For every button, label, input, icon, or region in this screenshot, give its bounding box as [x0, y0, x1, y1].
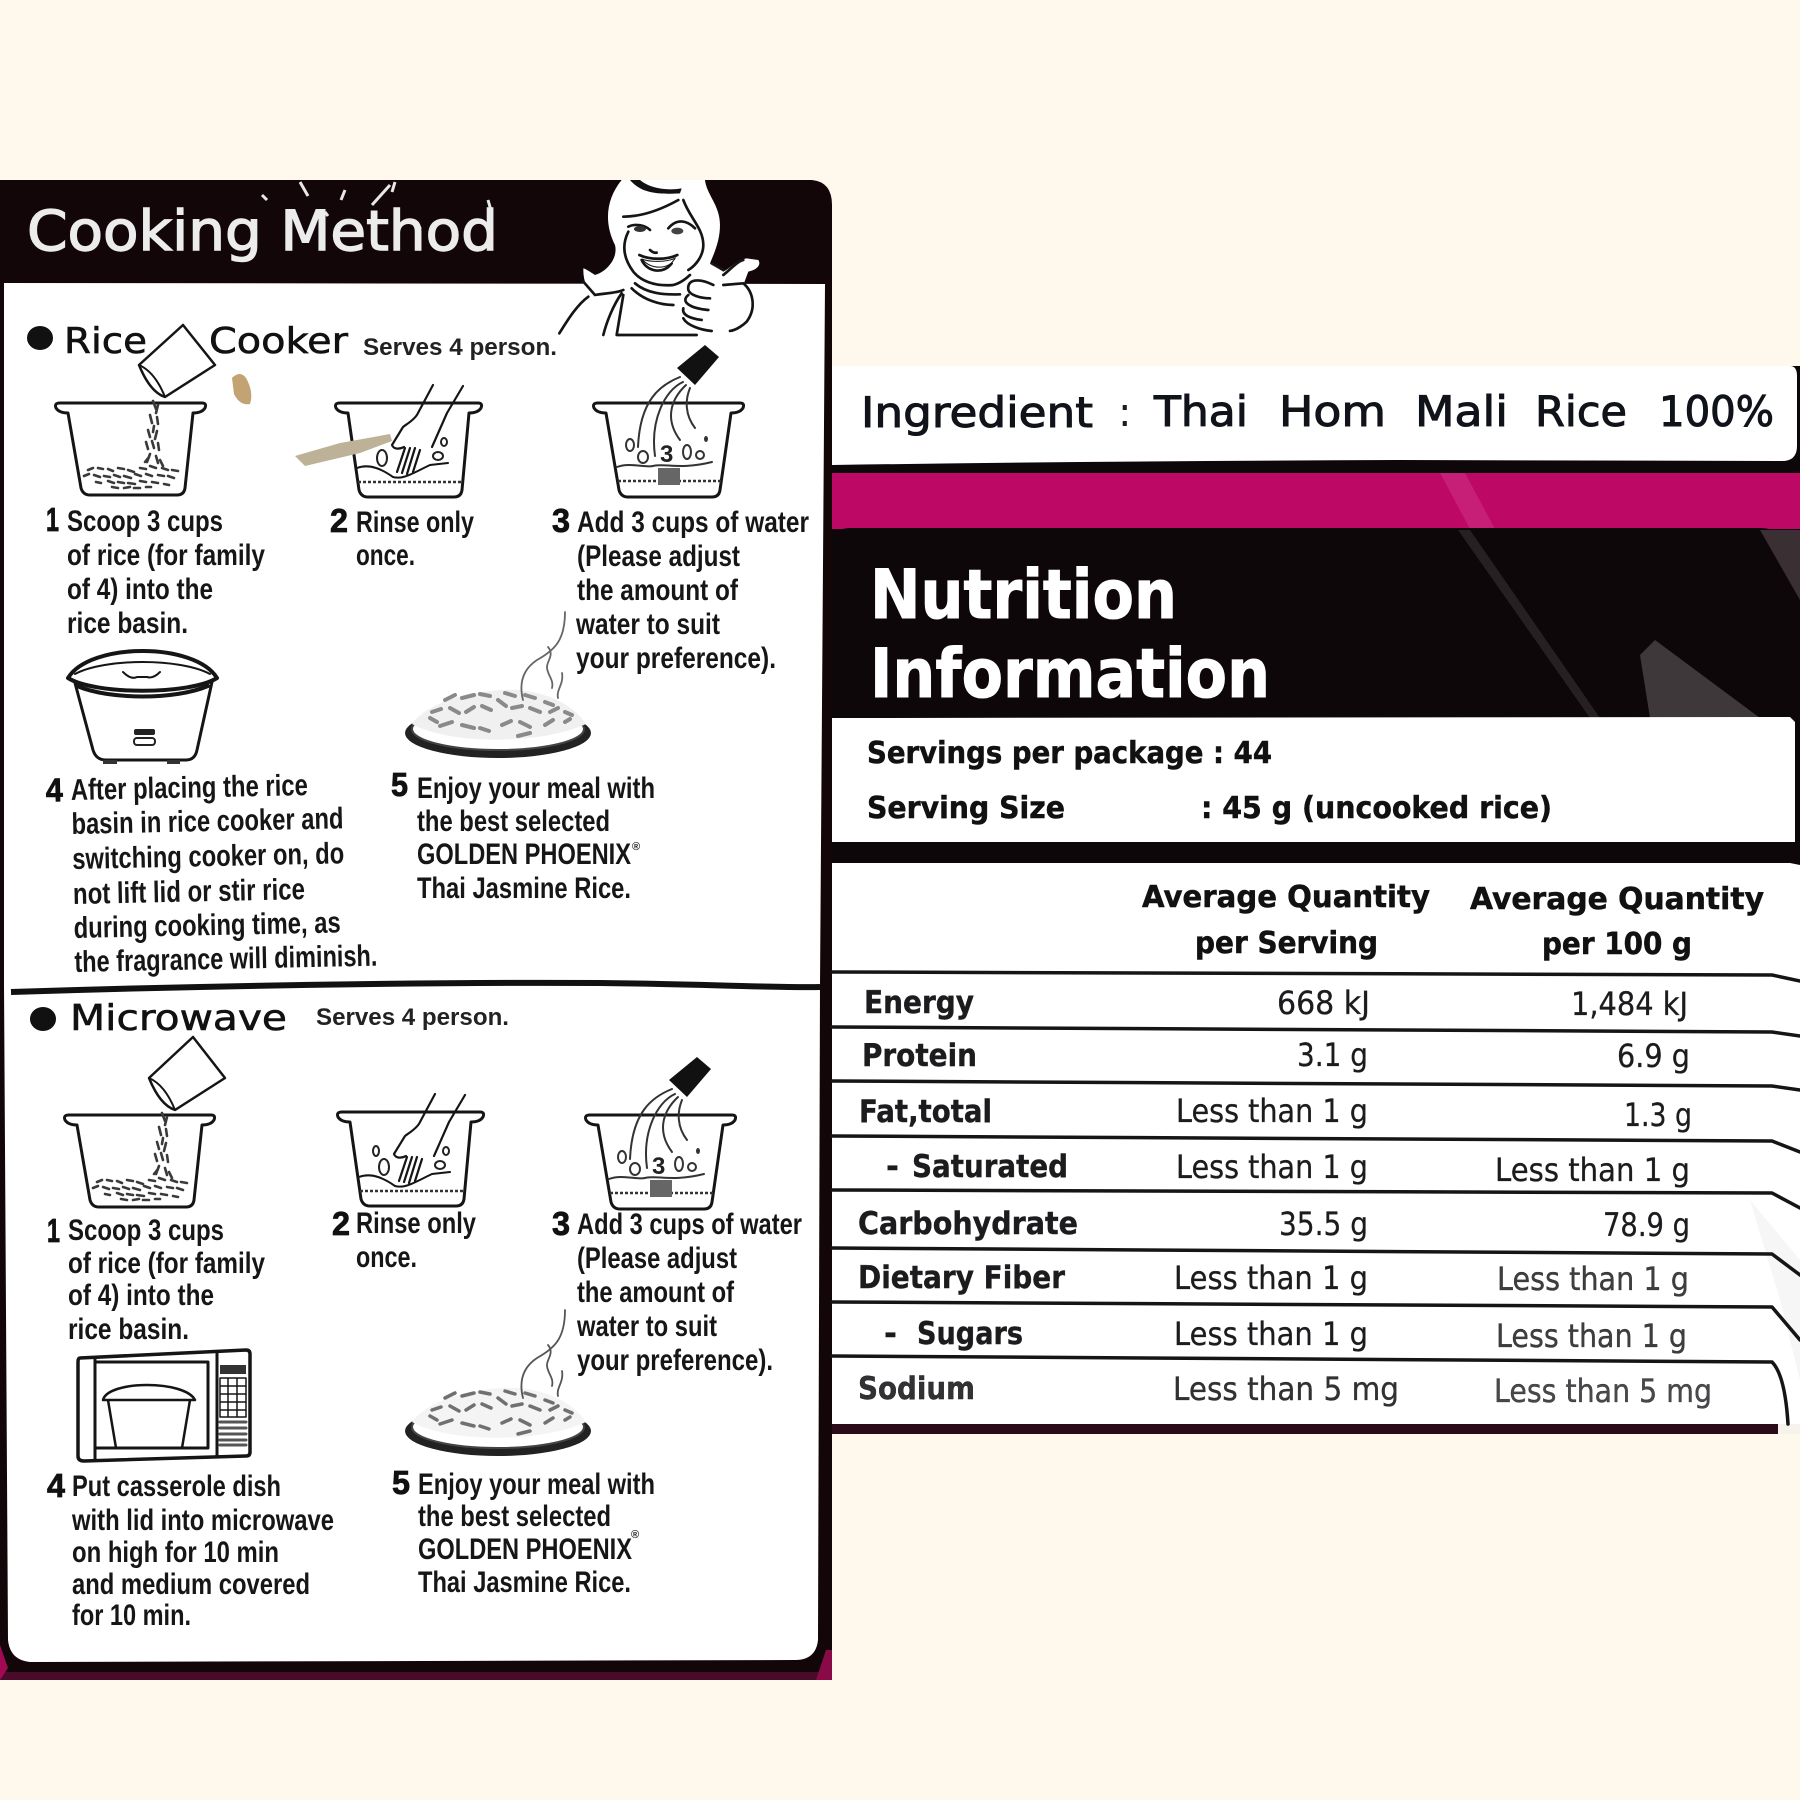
ingredient band: :	[1118, 390, 1131, 436]
row: dietary fiber: Less than 1 g	[1497, 1260, 1689, 1298]
step 4 text	[45, 765, 378, 980]
step 5 text	[392, 1464, 655, 1599]
step 3 text	[552, 1205, 802, 1377]
table header: Average Quantity	[1470, 882, 1764, 917]
step 1 text: Scoop 3 cups	[68, 1214, 224, 1247]
row: sugars	[884, 1315, 1687, 1355]
heading: Rice Cooker: Rice	[64, 321, 147, 362]
step 5 text: ®	[631, 1529, 639, 1541]
step 3 text: 3	[552, 1205, 570, 1242]
row: carbohydrate: 78.9 g	[1603, 1206, 1690, 1244]
table header: Average Quantity	[1142, 880, 1430, 915]
row: carbohydrate: 35.5 g	[1279, 1205, 1368, 1243]
step 3 text: water to suit	[575, 608, 720, 641]
heading: Rice Cooker	[64, 321, 348, 362]
bullet	[30, 1007, 56, 1031]
step 1 text: of rice (for family	[68, 1247, 265, 1280]
servings: Servings per package : 44	[867, 736, 1272, 771]
step 4 text: the fragrance will diminish.	[74, 940, 378, 979]
step 4 text: and medium covered	[72, 1568, 310, 1601]
row: saturated: Saturated	[912, 1149, 1068, 1185]
step 4 text: with lid into microwave	[71, 1504, 334, 1537]
subheading: serves: Serves 4 person.	[363, 334, 557, 361]
step 4 text: for 10 min.	[72, 1599, 191, 1632]
panel: ingredient and nutrition	[832, 366, 1800, 1434]
ingredient band: Ingredient	[861, 388, 1093, 437]
row: energy	[864, 984, 1688, 1023]
row: energy: 668 kJ	[1277, 984, 1370, 1022]
step 2 text: 2	[332, 1205, 350, 1242]
section: rice cooker	[27, 321, 809, 980]
heading: Microwave: Microwave	[70, 998, 287, 1039]
step 5 text: Enjoy your meal with	[418, 1468, 655, 1501]
row: saturated	[886, 1148, 1690, 1189]
step 4 text: After placing the rice	[70, 769, 308, 807]
step 4 text: not lift lid or stir rice	[73, 873, 305, 911]
icon: add water: 3	[660, 441, 673, 468]
step 4 text: on high for 10 min	[72, 1536, 279, 1569]
icon: thumbs-up woman	[559, 180, 759, 335]
step 3 text: water to suit	[576, 1310, 717, 1343]
step 1 text: rice basin.	[68, 1313, 189, 1346]
step 1 text: of 4) into the	[67, 573, 213, 606]
row: protein: 3.1 g	[1297, 1036, 1368, 1074]
ingredient band: Thai	[1153, 387, 1248, 436]
step 5 text: 5	[391, 766, 408, 803]
table header	[1142, 880, 1764, 962]
ingredient band: Hom	[1279, 387, 1386, 436]
row: dietary fiber: Less than 1 g	[1174, 1259, 1368, 1297]
nutrition table	[832, 863, 1800, 1434]
row: saturated: Less than 1 g	[1176, 1148, 1368, 1186]
row: protein	[862, 1036, 1690, 1075]
debris: rice grain husk	[232, 374, 251, 404]
step 4 text: switching cooker on, do	[72, 837, 345, 876]
step 4 text: Put casserole dish	[72, 1470, 281, 1503]
step 5 text: the best selected	[417, 805, 610, 838]
step 1 text	[46, 501, 265, 640]
row: sodium: Sodium	[858, 1371, 975, 1407]
step 4 text: during cooking time, as	[73, 906, 341, 945]
nutrition header: Nutrition	[870, 556, 1177, 635]
step 5 text: Thai Jasmine Rice.	[417, 872, 631, 905]
subheading: serves: Serves 4 person.	[316, 1004, 509, 1031]
nutrition header: Information	[870, 635, 1270, 714]
step 5 text: the best selected	[418, 1500, 611, 1533]
step 2 text: once.	[356, 1241, 417, 1274]
step 5 text: Thai Jasmine Rice.	[418, 1566, 631, 1599]
row: sugars: Less than 1 g	[1496, 1317, 1687, 1355]
row: dietary fiber	[858, 1259, 1689, 1298]
row: sodium	[858, 1370, 1712, 1410]
step 3 text: 3	[552, 502, 570, 539]
row: dietary fiber: Dietary Fiber	[858, 1260, 1066, 1296]
row: protein: 6.9 g	[1617, 1037, 1690, 1075]
row: energy: 1,484 kJ	[1571, 985, 1688, 1023]
bullet	[27, 326, 53, 350]
row: carbohydrate	[858, 1205, 1690, 1244]
panel: cooking method	[0, 180, 832, 1680]
icon: add water	[586, 1057, 736, 1209]
row: sugars: -	[884, 1316, 897, 1352]
step 5 text: Enjoy your meal with	[417, 772, 655, 805]
heading: Cooking Method: Cooking Method	[27, 199, 498, 263]
step 1 text: Scoop 3 cups	[67, 505, 223, 538]
heading: Rice Cooker: Cooker	[209, 321, 348, 362]
step 4 text: 4	[47, 1467, 66, 1504]
icon: plate of rice	[405, 1310, 591, 1456]
step 1 text: of 4) into the	[68, 1279, 214, 1312]
step 2 text: Rinse only	[356, 506, 474, 539]
row: sodium: Less than 5 mg	[1173, 1370, 1399, 1408]
step 2 text	[332, 1205, 476, 1274]
icon: scoop rice into basin	[56, 325, 215, 495]
row: fat: Less than 1 g	[1176, 1092, 1368, 1130]
row: protein: Protein	[862, 1038, 977, 1074]
icon: microwave oven	[78, 1350, 250, 1461]
step 3 text: (Please adjust	[577, 540, 740, 573]
row: saturated: -	[886, 1149, 899, 1185]
row: sugars: Less than 1 g	[1174, 1315, 1368, 1353]
servings: : 45 g (uncooked rice)	[1201, 791, 1552, 826]
debris: straw	[295, 434, 392, 466]
icon: rinse rice	[338, 1094, 484, 1206]
step 2 text: Rinse only	[356, 1207, 476, 1240]
icon: scoop rice into basin	[64, 1037, 225, 1207]
step 1 text: rice basin.	[67, 607, 188, 640]
row: fat	[859, 1092, 1692, 1134]
ingredient band: 100%	[1659, 387, 1774, 436]
step 2 text: 2	[330, 502, 348, 539]
step 1 text: 1	[47, 1212, 60, 1249]
step 2 text: once.	[356, 539, 415, 572]
step 3 text: Add 3 cups of water	[577, 1208, 802, 1241]
step 5 text: ®	[632, 841, 640, 853]
step 5 text	[391, 766, 655, 905]
step 4 text	[47, 1467, 334, 1632]
nutrition header	[832, 528, 1800, 718]
step 3 text	[552, 502, 809, 675]
icon: add water	[594, 345, 744, 497]
step 5 text: GOLDEN PHOENIX	[417, 838, 631, 871]
step 3 text: your preference).	[576, 642, 776, 675]
row: sugars: Sugars	[917, 1316, 1023, 1352]
band: magenta	[832, 473, 1800, 529]
step 4 text: 4	[45, 771, 64, 809]
servings: Serving Size	[867, 791, 1065, 826]
ingredient band: Mali	[1415, 387, 1508, 436]
step 3 text: the amount of	[577, 1276, 735, 1309]
step 5 text: 5	[392, 1464, 410, 1501]
step 3 text: your preference).	[577, 1344, 773, 1377]
row: fat: 1.3 g	[1624, 1096, 1692, 1134]
section: microwave	[30, 998, 802, 1632]
row: saturated: Less than 1 g	[1495, 1151, 1690, 1189]
ingredient band: Rice	[1535, 387, 1627, 436]
row: carbohydrate: Carbohydrate	[858, 1206, 1078, 1242]
step 1 text: of rice (for family	[67, 539, 265, 572]
table header: per 100 g	[1542, 927, 1692, 962]
step 4 text: basin in rice cooker and	[71, 802, 344, 841]
servings	[832, 717, 1795, 842]
step 3 text: (Please adjust	[577, 1242, 737, 1275]
step 3 text: Add 3 cups of water	[577, 506, 809, 539]
step 5 text: GOLDEN PHOENIX	[418, 1533, 632, 1566]
icon: plate of rice	[405, 612, 591, 758]
icon: rinse rice	[295, 385, 482, 497]
step 3 text: the amount of	[577, 574, 739, 607]
row: sodium: Less than 5 mg	[1494, 1372, 1712, 1410]
step 2 text	[330, 502, 474, 572]
icon: rice cooker	[68, 651, 217, 764]
row: energy: Energy	[864, 985, 974, 1021]
row: fat: Fat,total	[859, 1094, 992, 1130]
table header: per Serving	[1195, 926, 1378, 961]
step 1 text	[47, 1212, 265, 1346]
ingredient band	[832, 366, 1797, 465]
step 1 text: 1	[46, 501, 59, 538]
icon: add water: 3	[652, 1153, 665, 1180]
